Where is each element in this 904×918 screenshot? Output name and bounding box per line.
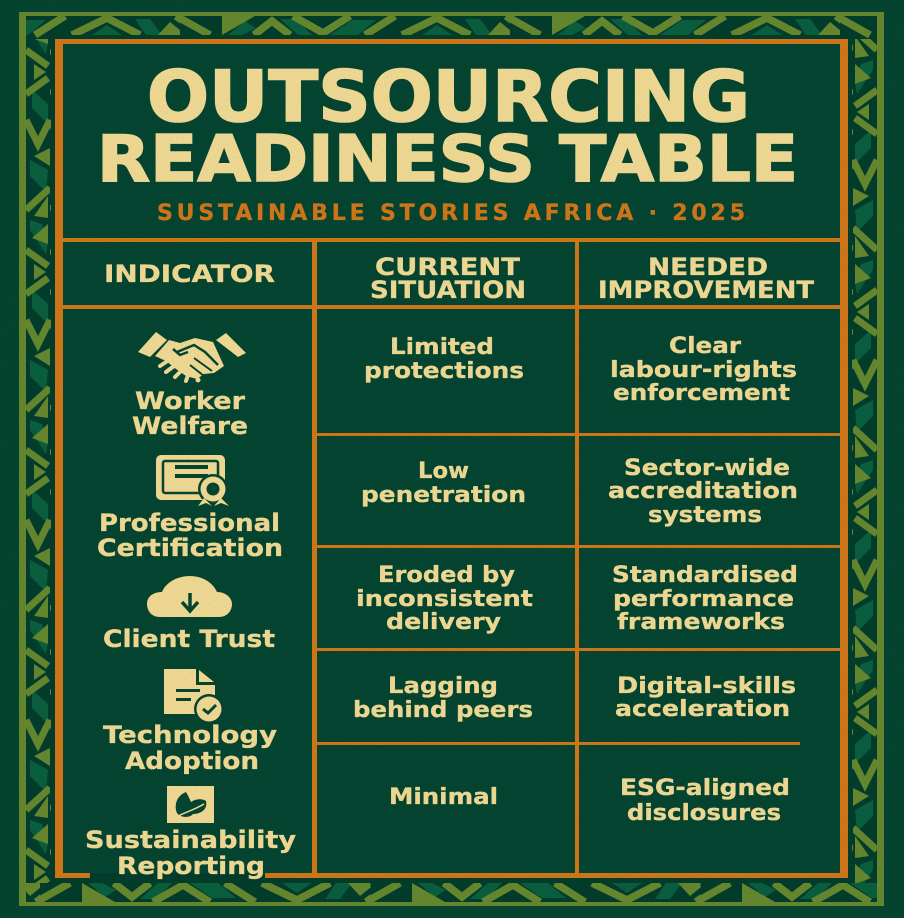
indicator: professional certification bbox=[97, 455, 283, 562]
indicator: professional certification: Certification bbox=[97, 534, 283, 562]
icon: handshake bbox=[138, 332, 246, 382]
icon: cloud with download arrow bbox=[147, 576, 232, 617]
title bbox=[97, 56, 798, 197]
table header bbox=[104, 253, 815, 304]
indicator: worker welfare: Worker bbox=[135, 387, 245, 415]
table header: NEEDED bbox=[648, 253, 768, 281]
needed improvement column: frameworks bbox=[617, 610, 785, 635]
indicator: technology adoption bbox=[103, 669, 277, 775]
icon: certificate with rosette bbox=[156, 455, 229, 506]
table header: CURRENT bbox=[375, 253, 521, 281]
indicator: professional certification: Professional bbox=[99, 509, 280, 537]
current situation column bbox=[353, 335, 534, 810]
needed improvement column: Clear bbox=[669, 334, 741, 359]
needed improvement column: Standardised bbox=[612, 563, 798, 588]
current situation column: Lagging bbox=[388, 674, 498, 699]
title: READINESS TABLE bbox=[97, 123, 798, 197]
needed improvement column: acceleration bbox=[615, 697, 790, 722]
current situation column: inconsistent bbox=[356, 587, 534, 612]
current situation column: protections bbox=[364, 359, 524, 384]
needed improvement column: ESG-aligned bbox=[620, 776, 790, 801]
needed improvement column: performance bbox=[613, 587, 794, 612]
current situation column: Low bbox=[418, 459, 469, 484]
table header: IMPROVEMENT bbox=[598, 276, 815, 304]
current situation column: delivery bbox=[386, 610, 501, 635]
indicator: sustainability reporting: Reporting bbox=[117, 852, 265, 880]
indicator: worker welfare bbox=[132, 332, 248, 440]
needed improvement column: disclosures bbox=[627, 801, 781, 826]
current situation column: Minimal bbox=[389, 785, 498, 810]
indicator: client trust bbox=[103, 576, 275, 653]
needed improvement column: enforcement bbox=[613, 381, 791, 406]
table header: SITUATION bbox=[370, 276, 526, 304]
subtitle: SUSTAINABLE STORIES AFRICA · 2025 bbox=[157, 201, 745, 226]
current situation column: behind peers bbox=[353, 698, 533, 723]
current situation column: penetration bbox=[361, 483, 526, 508]
indicator: sustainability reporting bbox=[85, 786, 296, 880]
current situation column: Eroded by bbox=[378, 563, 515, 588]
icon: document with check bbox=[164, 669, 224, 724]
needed improvement column: labour-rights bbox=[610, 358, 797, 383]
needed improvement column: systems bbox=[648, 503, 762, 528]
indicator: client trust: Client Trust bbox=[103, 625, 275, 653]
needed improvement column: Digital-skills bbox=[617, 674, 796, 699]
icon: leaf in square bbox=[167, 786, 214, 823]
needed improvement column bbox=[608, 334, 798, 826]
needed improvement column: Sector-wide bbox=[624, 456, 790, 481]
indicator: worker welfare: Welfare bbox=[132, 412, 248, 440]
needed improvement column: accreditation bbox=[608, 479, 798, 504]
indicator: technology adoption: Adoption bbox=[125, 747, 259, 775]
table header: INDICATOR bbox=[104, 260, 275, 288]
current situation column: Limited bbox=[390, 335, 494, 360]
indicator: sustainability reporting: Sustainability bbox=[85, 826, 296, 854]
indicator: technology adoption: Technology bbox=[103, 721, 277, 749]
title: OUTSOURCING bbox=[147, 56, 750, 138]
